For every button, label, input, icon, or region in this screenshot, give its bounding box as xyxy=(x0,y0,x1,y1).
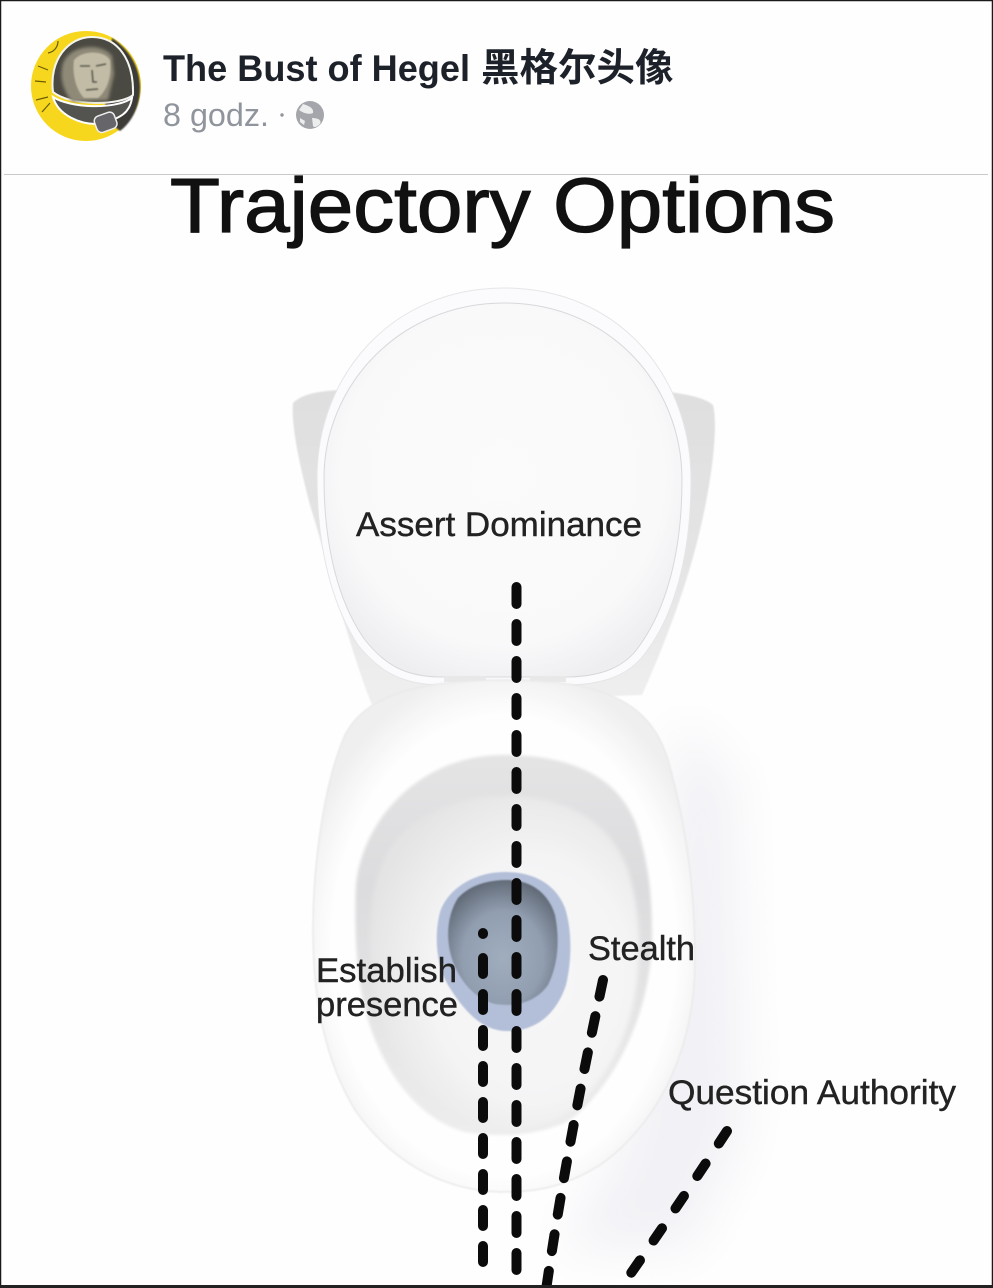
avatar collar knob xyxy=(93,111,118,134)
header panel cover xyxy=(0,0,993,174)
label: establish presence xyxy=(316,952,458,1024)
bottom frame edge xyxy=(0,1285,993,1288)
chart title: Trajectory Options xyxy=(170,163,835,249)
line: assert dominance xyxy=(512,587,522,1278)
label: question authority: Question Authority xyxy=(668,1074,956,1112)
post timestamp: 8 godz. xyxy=(163,97,269,133)
lid outer rim xyxy=(317,288,691,685)
lid inner surface xyxy=(324,303,682,677)
lid hinges xyxy=(444,676,566,682)
header divider xyxy=(4,174,988,175)
bowl basin xyxy=(370,796,639,1129)
avatar portrait features xyxy=(80,64,106,90)
label: assert dominance: Assert Dominance xyxy=(356,506,642,544)
avatar portrait face xyxy=(73,52,110,98)
soft floor shadow xyxy=(560,720,745,1250)
page name latin: The Bust of Hegel xyxy=(163,48,470,89)
avatar portrait hair xyxy=(61,47,114,102)
line: establish presence xyxy=(478,933,488,1272)
line: stealth xyxy=(546,980,603,1288)
trajectory dashed lines xyxy=(483,587,727,1288)
bowl outer seat xyxy=(313,680,695,1192)
icon: globe xyxy=(296,101,324,129)
timestamp separator xyxy=(280,113,284,117)
avatar sketch marks xyxy=(35,41,58,112)
page name xyxy=(163,47,674,90)
avatar yellow disc xyxy=(31,31,141,141)
toilet illustration xyxy=(293,288,715,1192)
page name chinese: 黑格尔头像 xyxy=(481,47,674,90)
water surface xyxy=(448,880,558,1005)
toilet tank xyxy=(293,390,715,705)
avatar xyxy=(31,31,141,141)
avatar dark background xyxy=(104,38,140,131)
toilet bowl xyxy=(313,680,695,1192)
water outer ring xyxy=(437,872,570,1031)
line: question authority xyxy=(615,1131,727,1288)
label: stealth: Stealth xyxy=(588,930,695,968)
avatar helmet collar xyxy=(53,97,132,124)
label: establish presence: Establish xyxy=(316,952,457,990)
bowl inner wall xyxy=(355,755,652,1135)
label: establish presence: presence xyxy=(316,986,458,1024)
avatar helmet glass xyxy=(52,37,133,103)
toilet lid xyxy=(317,288,691,685)
